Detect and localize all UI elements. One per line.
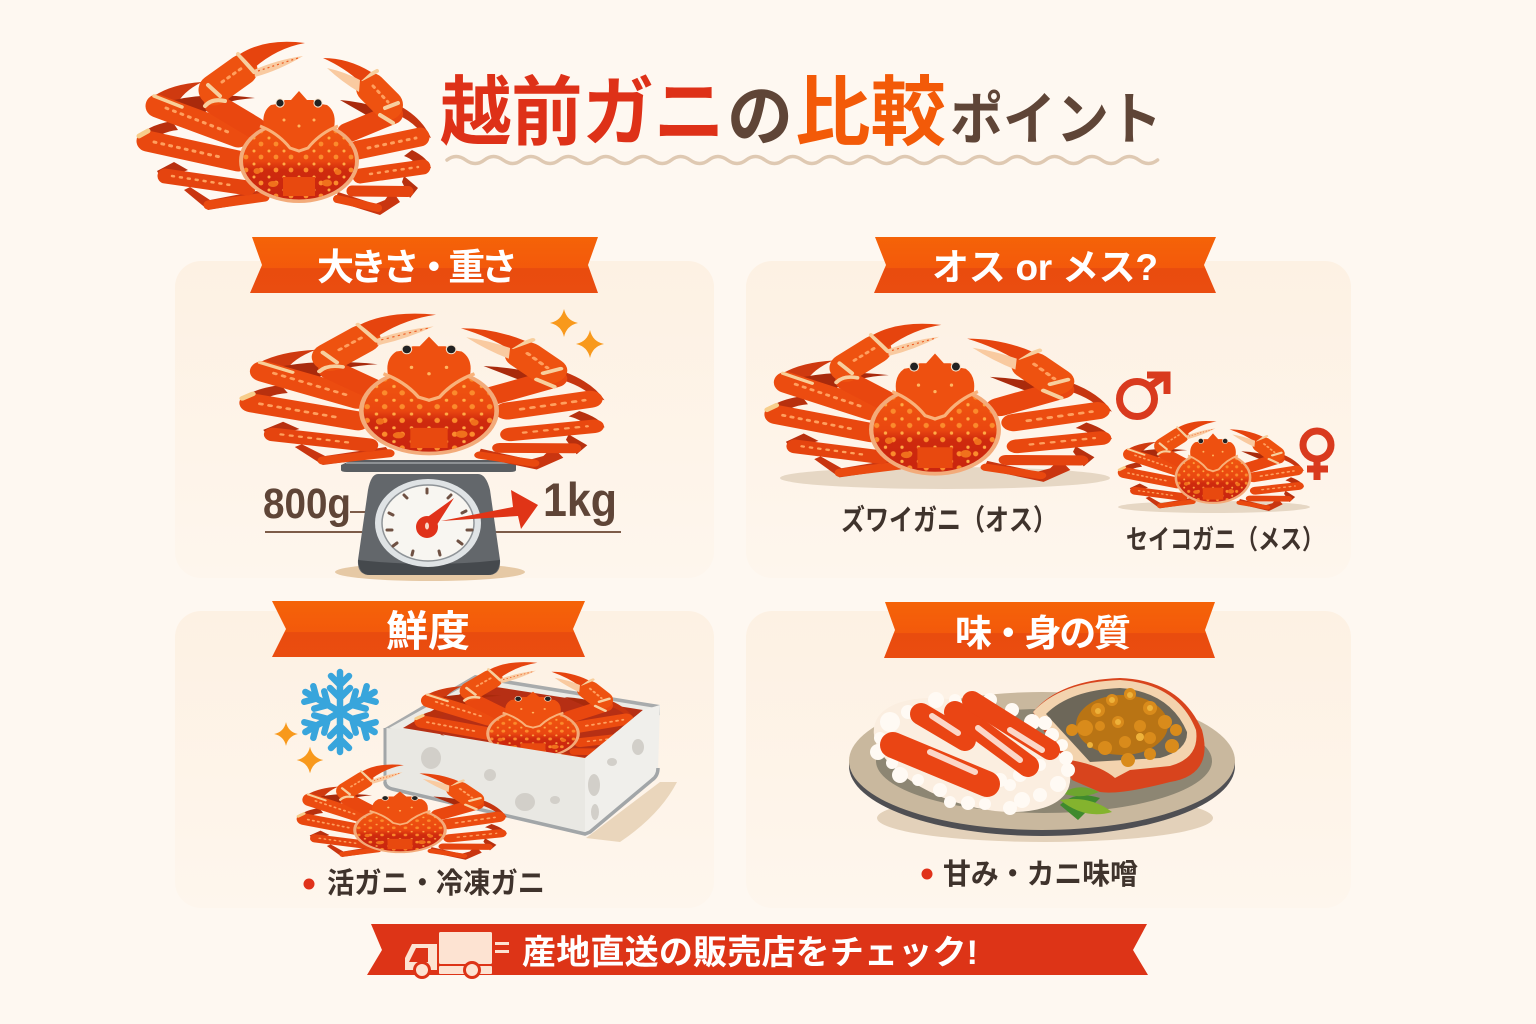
female crab xyxy=(1119,421,1304,511)
polystyrene box with crab xyxy=(385,662,677,842)
label: 800g: 800g xyxy=(263,480,351,528)
title: の xyxy=(727,79,793,155)
small crab in front of box xyxy=(298,764,507,860)
crab on scale xyxy=(241,314,605,470)
plate xyxy=(849,692,1235,836)
icon: female symbol xyxy=(1303,431,1331,480)
heading ribbon: size and weight xyxy=(250,237,598,293)
icon: male symbol xyxy=(1120,375,1167,416)
heading ribbon: size and weight: 大きさ・重さ xyxy=(317,247,518,288)
panel: male or female xyxy=(746,261,1351,578)
label: snow crab male: ズワイガニ（オス） xyxy=(841,503,1057,537)
label: live and frozen crab: 活ガニ・冷凍ガニ xyxy=(327,867,545,900)
icon: sparkles xyxy=(550,309,604,358)
heading ribbon: freshness: 鮮度 xyxy=(386,608,470,655)
title crab illustration xyxy=(138,42,431,215)
arrow: 800g to 1kg xyxy=(441,490,538,529)
banner text: 産地直送の販売店をチェック! xyxy=(522,934,978,972)
icon: snowflake xyxy=(300,672,380,752)
icon: sparkles xyxy=(274,722,323,773)
shadow under male crab xyxy=(780,467,1110,489)
title xyxy=(440,71,1162,156)
label: 1kg: 1kg xyxy=(543,473,617,526)
title: 比較 xyxy=(795,71,946,156)
panel: taste and meat quality xyxy=(746,611,1351,908)
bullet xyxy=(304,878,314,890)
heading ribbon: freshness xyxy=(272,601,585,657)
call-to-action banner xyxy=(367,924,1148,979)
weight baseline rules xyxy=(265,512,621,532)
heading ribbon: taste and meat quality xyxy=(884,602,1215,658)
heading ribbon: taste and meat quality: 味・身の質 xyxy=(955,613,1131,654)
heading ribbon: male or female xyxy=(874,237,1216,293)
male crab xyxy=(766,324,1112,482)
label: seiko crab female: セイコガニ（メス） xyxy=(1126,525,1324,555)
shadow under female crab xyxy=(1118,501,1310,513)
title: 越前ガニ xyxy=(440,71,725,156)
crab shell with miso xyxy=(1033,678,1205,793)
icon: delivery truck xyxy=(405,932,509,979)
panel: size and weight xyxy=(175,261,714,581)
panel: freshness xyxy=(175,611,714,908)
shadow under scale xyxy=(335,563,525,581)
bullet xyxy=(922,868,932,880)
heading ribbon: male or female: オス or メス? xyxy=(932,247,1158,288)
label: sweetness and crab miso: 甘み・カニ味噌 xyxy=(943,858,1138,891)
leaves xyxy=(1060,787,1112,820)
plate shadow xyxy=(877,794,1213,842)
icon: kitchen scale xyxy=(341,460,516,575)
title: ポイント xyxy=(950,88,1162,152)
rice with crab meat xyxy=(860,676,1084,834)
